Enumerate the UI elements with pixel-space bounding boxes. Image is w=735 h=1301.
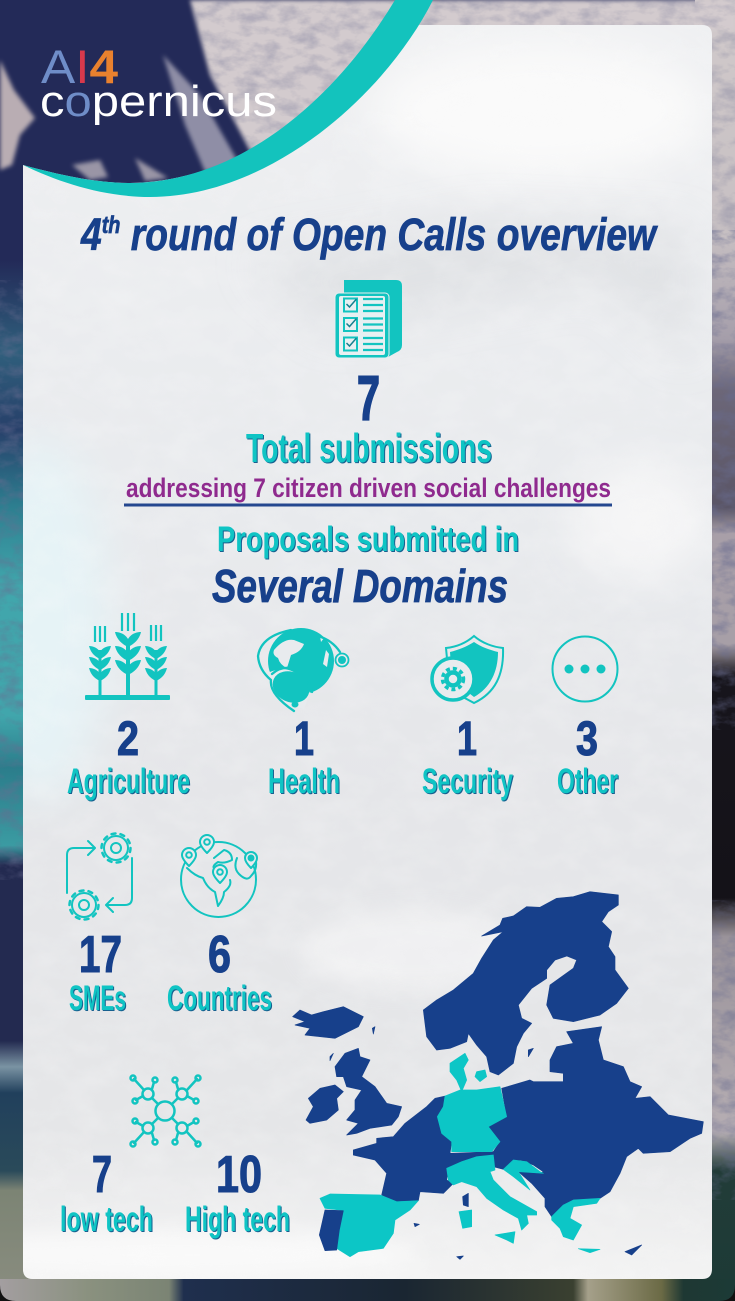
Ireland	[306, 1085, 343, 1123]
number: health: 1	[294, 713, 314, 766]
Iceland	[293, 1007, 363, 1038]
label: other: Other	[557, 762, 618, 801]
number: SMEs: 17	[79, 926, 122, 984]
number: agriculture: 2	[117, 713, 139, 766]
several domains heading: Several Domains	[212, 560, 508, 612]
Portugal	[319, 1210, 343, 1251]
label: SMEs: SMEs	[69, 979, 126, 1018]
logo	[40, 40, 277, 126]
title: 4	[81, 209, 106, 260]
label: high tech: High tech	[185, 1200, 290, 1239]
icon: globe with pins	[181, 835, 257, 917]
Germany	[437, 1087, 507, 1152]
label: low tech: low tech	[60, 1200, 153, 1239]
icon: checklist documents	[335, 280, 402, 358]
number: low tech: 7	[92, 1146, 112, 1204]
France and Benelux	[353, 1096, 493, 1202]
number: security: 1	[457, 713, 477, 766]
number: countries: 6	[208, 926, 231, 984]
icon: network	[130, 1076, 200, 1146]
label: health: Health	[268, 762, 340, 801]
small islands	[330, 1027, 642, 1259]
social challenges subtitle: addressing 7 citizen driven social challenges	[126, 473, 611, 503]
Denmark	[450, 1053, 487, 1092]
page rounded corners	[0, 1285, 735, 1301]
domains heading: Proposals submitted in	[217, 520, 519, 559]
logo: AI4	[41, 40, 118, 93]
label: agriculture: Agriculture	[67, 762, 190, 801]
label: security: Security	[422, 762, 513, 801]
map of Europe	[293, 892, 703, 1259]
Spain	[320, 1194, 418, 1257]
teal arc	[23, 0, 433, 197]
Scandinavia	[423, 892, 628, 1075]
Great Britain	[335, 1048, 402, 1135]
icon: other	[552, 636, 618, 702]
Croatia	[503, 1160, 543, 1190]
title: th	[102, 212, 120, 239]
total submissions number: 7	[357, 364, 380, 434]
number: high tech: 10	[216, 1146, 262, 1204]
total submissions label: Total submissions	[246, 425, 492, 471]
number: other: 3	[576, 713, 598, 766]
Italy, Switzerland, Austria	[447, 1155, 537, 1243]
icon: wheat	[85, 613, 170, 700]
Greece	[552, 1198, 600, 1253]
logo: copernicus	[40, 77, 277, 126]
icon: SME gears cycle	[67, 834, 132, 920]
Eastern and Central Europe	[488, 1027, 703, 1217]
icon: shield with gear	[432, 636, 503, 703]
label: countries: Countries	[167, 979, 272, 1018]
icon: earth with stethoscope	[258, 628, 348, 711]
